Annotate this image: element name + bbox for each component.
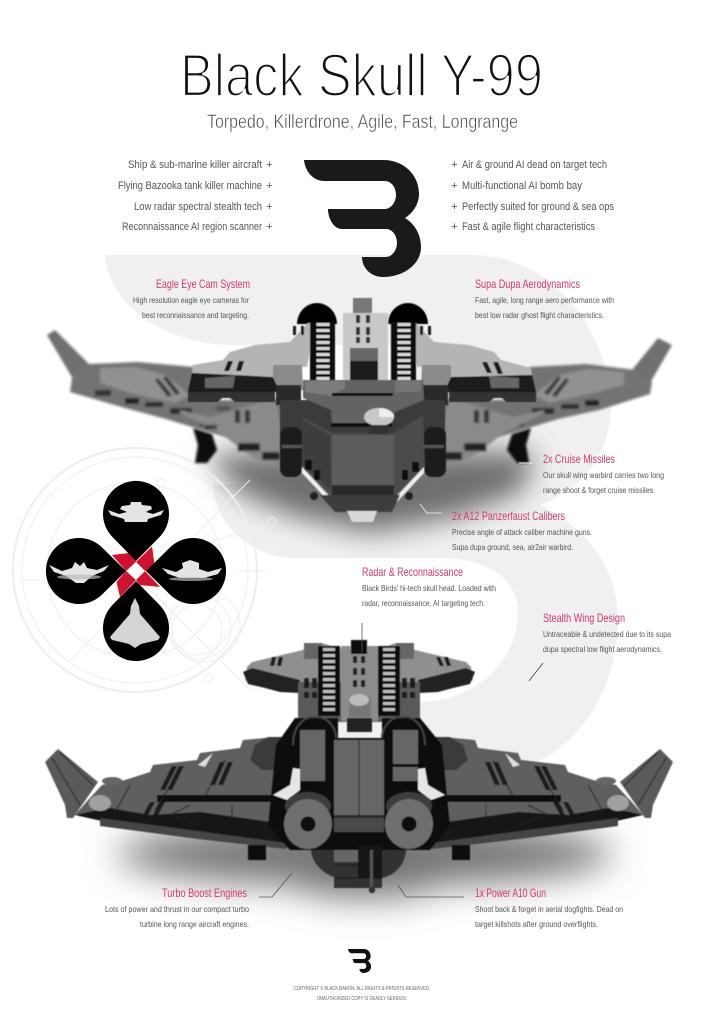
- callout: Aerodynamics: Fast, agile, long range aero performance with: [475, 295, 614, 305]
- feature list: left: [118, 159, 273, 233]
- mini aircraft icon: left: [49, 562, 109, 583]
- right wing: [434, 338, 672, 470]
- top petal: [103, 481, 169, 561]
- callout: Turbo Boost: turbine long range aircraft engines.: [140, 919, 249, 929]
- callout: Eagle Eye: High resolution eagle eye cameras for: [133, 295, 249, 305]
- landing struts: [310, 492, 318, 500]
- tail dome: [349, 697, 371, 717]
- rear wing pair, blurred: [47, 330, 672, 470]
- spine hatch: [350, 348, 378, 380]
- callout: Turbo Boost: [105, 886, 249, 929]
- rear hull black base: [268, 718, 450, 850]
- aircraft: rear view: [45, 640, 673, 893]
- callout: Radar: [362, 565, 496, 608]
- copyright: COPYRIGHT © BLACK BARON. ALL RIGHTS & PATENTS RESERVED.: [294, 985, 430, 992]
- front wing plates: [245, 643, 345, 700]
- right petal: [146, 538, 226, 604]
- callout: Aerodynamics: [475, 277, 614, 320]
- top eye dome: [364, 408, 394, 426]
- feature list: left: Low radar spectral stealth tech: [134, 201, 262, 213]
- nose light: [347, 511, 377, 522]
- plate details: [224, 326, 503, 374]
- right engine: [385, 799, 433, 849]
- hull cover plates: [273, 365, 303, 392]
- callout: Panzerfaust: Supa dupa ground, sea, air2air warbird.: [452, 542, 573, 552]
- engine gear rings: [285, 792, 331, 820]
- callout: Stealth Wing: Stealth Wing Design: [543, 611, 625, 625]
- callout: Stealth Wing: dupa spectral low flight aerodynamics.: [543, 644, 662, 654]
- background: giant grey B shape: [105, 255, 618, 775]
- dark wing gaps and bars: [188, 373, 280, 392]
- right wing plate: [408, 323, 532, 377]
- red pinwheel: [112, 546, 160, 597]
- left petal: [46, 538, 126, 604]
- feature list: left: +: [266, 159, 273, 171]
- feature list: left: Ship & sub-marine killer aircraft: [128, 159, 263, 171]
- nose cube: [351, 640, 367, 654]
- callout: Cruise Missiles: Our skull wing warbird carries two long: [543, 470, 664, 480]
- white fins: [273, 768, 300, 800]
- mini aircraft icon: bottom: [110, 598, 160, 648]
- callout: A10 Gun: Shoot back & forget in aerial dogfights. Dead on: [475, 904, 623, 914]
- callout: A10 Gun: target killshots after ground overflights.: [475, 919, 598, 929]
- callout: Stealth Wing: [543, 611, 671, 654]
- centre plate: [334, 740, 384, 828]
- callout: Cruise Missiles: [543, 452, 664, 495]
- fuselage: [298, 682, 420, 722]
- gun barrel: [369, 850, 375, 893]
- callout: Aerodynamics: Supa Dupa Aerodynamics: [475, 277, 580, 291]
- feature list: right: [451, 159, 614, 233]
- mini aircraft icon: right: [162, 560, 222, 581]
- leader: cruise missiles: [519, 462, 533, 464]
- callout: Radar: radar, reconnaissance, AI targeting tech.: [362, 598, 485, 608]
- HUD circular diagram: [13, 448, 276, 692]
- clover diagram of four aircraft views: [46, 481, 226, 661]
- head lower face: [302, 415, 425, 497]
- feature list: left: +: [266, 221, 273, 233]
- centre spine: [341, 646, 378, 721]
- spine top block: [353, 298, 372, 313]
- leader: radar: [361, 623, 363, 652]
- copyright: UNAUTHORIZED COPY IS DEADLY SERIOUS.: [317, 996, 407, 1002]
- column stripes: [318, 646, 340, 716]
- copyright: [294, 985, 430, 1002]
- callout: A10 Gun: [475, 886, 623, 929]
- aircraft: front view: [47, 298, 672, 522]
- spine slots: [356, 315, 370, 343]
- feature list: right: Air & ground AI dead on target tech: [462, 159, 607, 171]
- leader: A10 gun: [398, 885, 464, 897]
- callout: Eagle Eye: best reconnaissance and targeting.: [142, 310, 249, 320]
- callout: Cruise Missiles: 2x Cruise Missiles: [543, 452, 615, 466]
- left engine: [284, 799, 332, 849]
- feature list: right: Perfectly suited for ground & sea ops: [462, 201, 614, 213]
- subtitle: Torpedo, Killerdrone, Agile, Fast, Longrange: [207, 112, 518, 133]
- feature list: left: Flying Bazooka tank killer machine: [118, 180, 262, 192]
- missile columns: [310, 322, 335, 382]
- nacelle plates: [300, 730, 325, 781]
- feature list: left: +: [266, 180, 273, 192]
- left wing: [47, 330, 290, 470]
- teeth: [302, 467, 424, 503]
- leader: stealth wing: [529, 663, 543, 681]
- callout: Cruise Missiles: range shoot & forget cruise missiles.: [543, 485, 655, 495]
- side cheek boxes: [280, 427, 302, 477]
- feature list: right: +: [451, 159, 458, 171]
- white center diamond: [127, 562, 145, 580]
- feature list: right: Fast & agile flight characteristics: [462, 221, 595, 233]
- feature list: right: +: [451, 201, 458, 213]
- callout: Aerodynamics: best low radar ghost flight characteristics.: [475, 310, 604, 320]
- shadow: upper aircraft: [205, 452, 535, 533]
- callout: Panzerfaust: Precise angle of attack caliber machine guns.: [452, 527, 592, 537]
- mini aircraft icon: top: [108, 502, 164, 522]
- chin: [320, 495, 400, 512]
- callout: Radar: Radar & Reconnaissance: [362, 565, 463, 579]
- head top: [303, 380, 424, 425]
- shadow: lower aircraft: [117, 822, 613, 898]
- feature list: left: Reconnaissance AI region scanner: [122, 221, 262, 233]
- nacelle arches: [293, 717, 336, 745]
- footer logo: [348, 949, 371, 973]
- left wing plate: [192, 323, 316, 377]
- feature list: right: Multi-functional AI bomb bay: [462, 180, 582, 192]
- leader: calibers: [420, 504, 442, 513]
- callout: Eagle Eye: [133, 277, 250, 320]
- leader: turbo engines: [259, 873, 292, 897]
- hull shadow block: [280, 400, 445, 465]
- callout: A10 Gun: 1x Power A10 Gun: [475, 886, 546, 900]
- callout: Panzerfaust: [452, 509, 592, 552]
- logo: large B: [304, 160, 421, 277]
- bottom petal: [103, 581, 169, 661]
- callout: Turbo Boost: Turbo Boost Engines: [162, 886, 247, 900]
- left main wing: [45, 737, 300, 860]
- callout: Eagle Eye: Eagle Eye Cam System: [156, 277, 250, 291]
- right main wing: [418, 737, 673, 860]
- belly: [311, 850, 406, 888]
- feature list: right: +: [451, 221, 458, 233]
- callout: Stealth Wing: Untraceable & undetected due to its supa: [543, 629, 671, 639]
- title: Black Skull Y-99: [180, 42, 543, 109]
- missile nacelle domes: [297, 303, 337, 324]
- feature list: left: +: [266, 201, 273, 213]
- callout: Turbo Boost: Lots of power and thrust in our compact turbo: [105, 904, 249, 914]
- spine: [343, 313, 388, 383]
- callout: Panzerfaust: 2x A12 Panzerfaust Calibers: [452, 509, 565, 523]
- feature list: right: +: [451, 180, 458, 192]
- callout: Radar: Black Birds' hi-tech skull head. Loaded with: [362, 583, 496, 593]
